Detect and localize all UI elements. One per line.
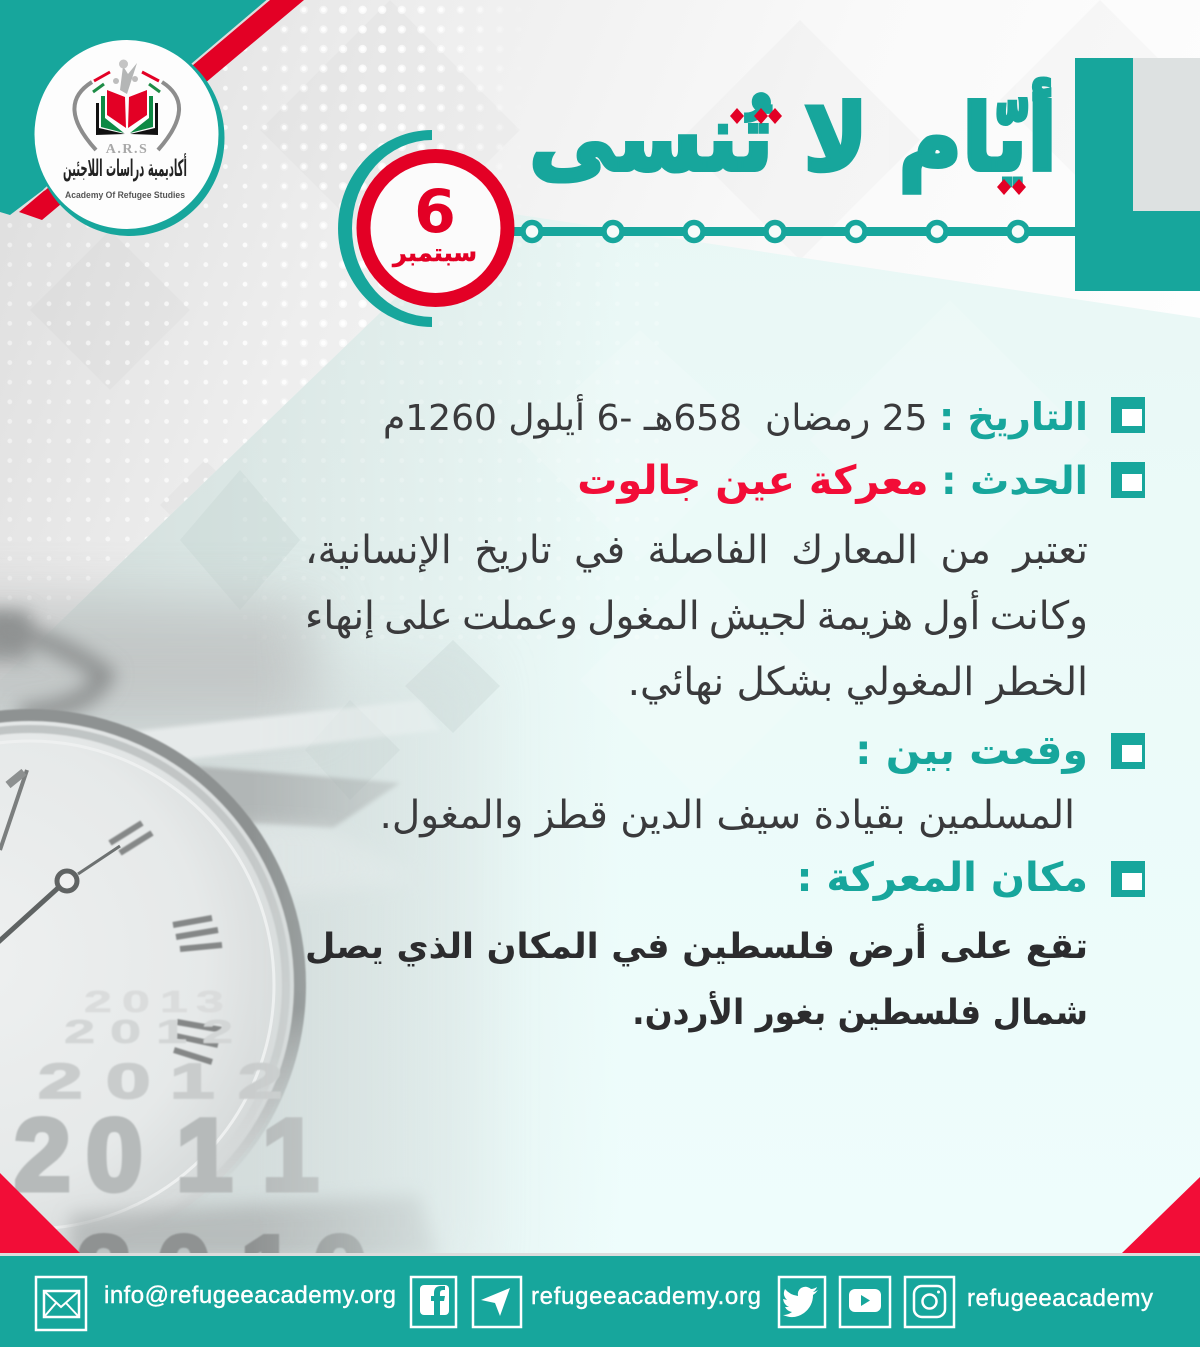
date number: 6 (414, 177, 456, 247)
event description: وكانت أول هزيمة لجيش المغول وعملت على إنهاء (305, 594, 1088, 639)
logo emblem (74, 60, 179, 150)
bullet: between (1111, 733, 1145, 769)
date line: التاريخ : 25 رمضان 658هـ -6 أيلول 1260م (383, 395, 1088, 439)
event description (305, 528, 1088, 705)
timeline with dots (514, 220, 1075, 244)
header block (1075, 58, 1200, 291)
bullet: date (1111, 397, 1145, 433)
logo initials: A.R.S (106, 142, 148, 157)
title: أيّام لا تُنسى (529, 78, 1057, 193)
bullet: location (1111, 861, 1145, 897)
location description: تقع على أرض فلسطين في المكان الذي يصل (305, 927, 1088, 967)
website text: refugeeacademy.org (531, 1283, 761, 1310)
event description: تعتبر من المعارك الفاصلة في تاريخ الإنسانية، (305, 528, 1088, 573)
background artwork: 2011 (14, 1098, 319, 1212)
between text: المسلمين بقيادة سيف الدين قطز والمغول. (380, 793, 1075, 838)
logo english name: Academy Of Refugee Studies (65, 190, 185, 200)
icon: facebook (411, 1277, 456, 1327)
bullet: event (1111, 462, 1145, 498)
background artwork: 2010 (76, 1215, 368, 1327)
event line: الحدث : معركة عين جالوت (577, 458, 1088, 504)
location description: شمال فلسطين بغور الأردن. (632, 993, 1088, 1033)
icon: instagram (905, 1277, 954, 1327)
icon: telegram (473, 1277, 521, 1327)
location heading: مكان المعركة : (796, 855, 1088, 901)
between heading: وقعت بين : (855, 726, 1088, 774)
icon: twitter (779, 1277, 825, 1327)
top-left corner ribbon (0, 0, 304, 220)
background artwork: 2012 (38, 1054, 282, 1109)
social handle text: refugeeacademy (967, 1285, 1153, 1312)
footer bar (0, 1256, 1200, 1347)
icon: mail (36, 1277, 86, 1330)
icon: youtube (840, 1277, 890, 1327)
date badge (338, 130, 514, 327)
email text: info@refugeeacademy.org (104, 1282, 396, 1309)
background artwork: 2013 (84, 984, 224, 1019)
logo badge (34, 40, 224, 236)
date month: سبتمبر (392, 239, 477, 267)
location description (305, 923, 1088, 1033)
background artwork: 2012 (64, 1012, 233, 1050)
event description: الخطر المغولي بشكل نهائي. (628, 660, 1088, 705)
